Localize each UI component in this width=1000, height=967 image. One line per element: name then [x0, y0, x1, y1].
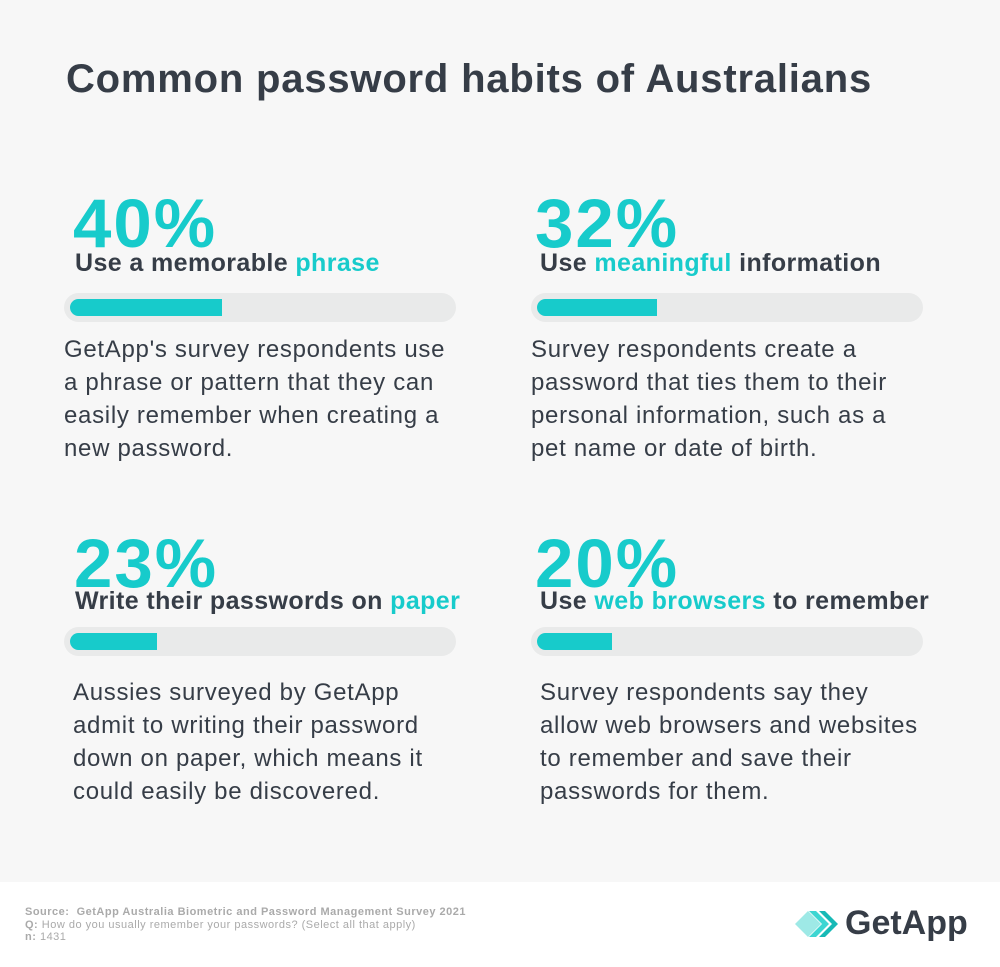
bar 40% — [64, 293, 456, 322]
text: easily remember when creating a — [64, 402, 439, 429]
subtitle: Use a memorable phrase — [75, 249, 380, 277]
text: personal information, such as a — [531, 402, 886, 429]
bar 20% — [531, 627, 923, 656]
panel: meaningful information — [531, 185, 923, 462]
text: a phrase or pattern that they can — [64, 369, 434, 396]
bar 23% — [64, 627, 456, 656]
panel: memorable phrase — [64, 185, 456, 462]
text: Survey respondents create a — [531, 336, 857, 363]
text: new password. — [64, 435, 233, 462]
footer source: Q: How do you usually remember your passwords? (Select all that apply) — [25, 918, 416, 930]
text: down on paper, which means it — [73, 745, 423, 772]
text — [531, 336, 887, 462]
text: password that ties them to their — [531, 369, 887, 396]
text — [73, 679, 423, 805]
panel: paper — [64, 525, 460, 805]
subtitle: Write their passwords on paper — [75, 587, 460, 615]
text: GetApp's survey respondents use — [64, 336, 445, 363]
text: passwords for them. — [540, 778, 769, 805]
stat 20%: 20% — [535, 525, 679, 602]
subtitle: Use meaningful information — [540, 249, 881, 277]
text: pet name or date of birth. — [531, 435, 817, 462]
logo text: GetApp — [845, 904, 968, 942]
text: allow web browsers and websites — [540, 712, 918, 739]
stat 23%: 23% — [74, 525, 218, 602]
stat 32%: 32% — [535, 185, 679, 262]
footer source: n: 1431 — [25, 931, 66, 943]
text — [64, 336, 445, 462]
text — [540, 679, 918, 805]
text: could easily be discovered. — [73, 778, 380, 805]
footer source: Source: GetApp Australia Biometric and Password Management Survey 2021 — [25, 906, 466, 918]
icon: chevrons — [795, 911, 838, 937]
text: Survey respondents say they — [540, 679, 868, 706]
footer source — [25, 906, 466, 943]
text: Aussies surveyed by GetApp — [73, 679, 399, 706]
title: Common password habits of Australians — [66, 57, 872, 101]
logo — [795, 904, 968, 942]
stat 40%: 40% — [73, 185, 217, 262]
panel: web browsers — [531, 525, 929, 805]
bar 32% — [531, 293, 923, 322]
text: to remember and save their — [540, 745, 852, 772]
text: admit to writing their password — [73, 712, 419, 739]
subtitle: Use web browsers to remember — [540, 587, 929, 615]
